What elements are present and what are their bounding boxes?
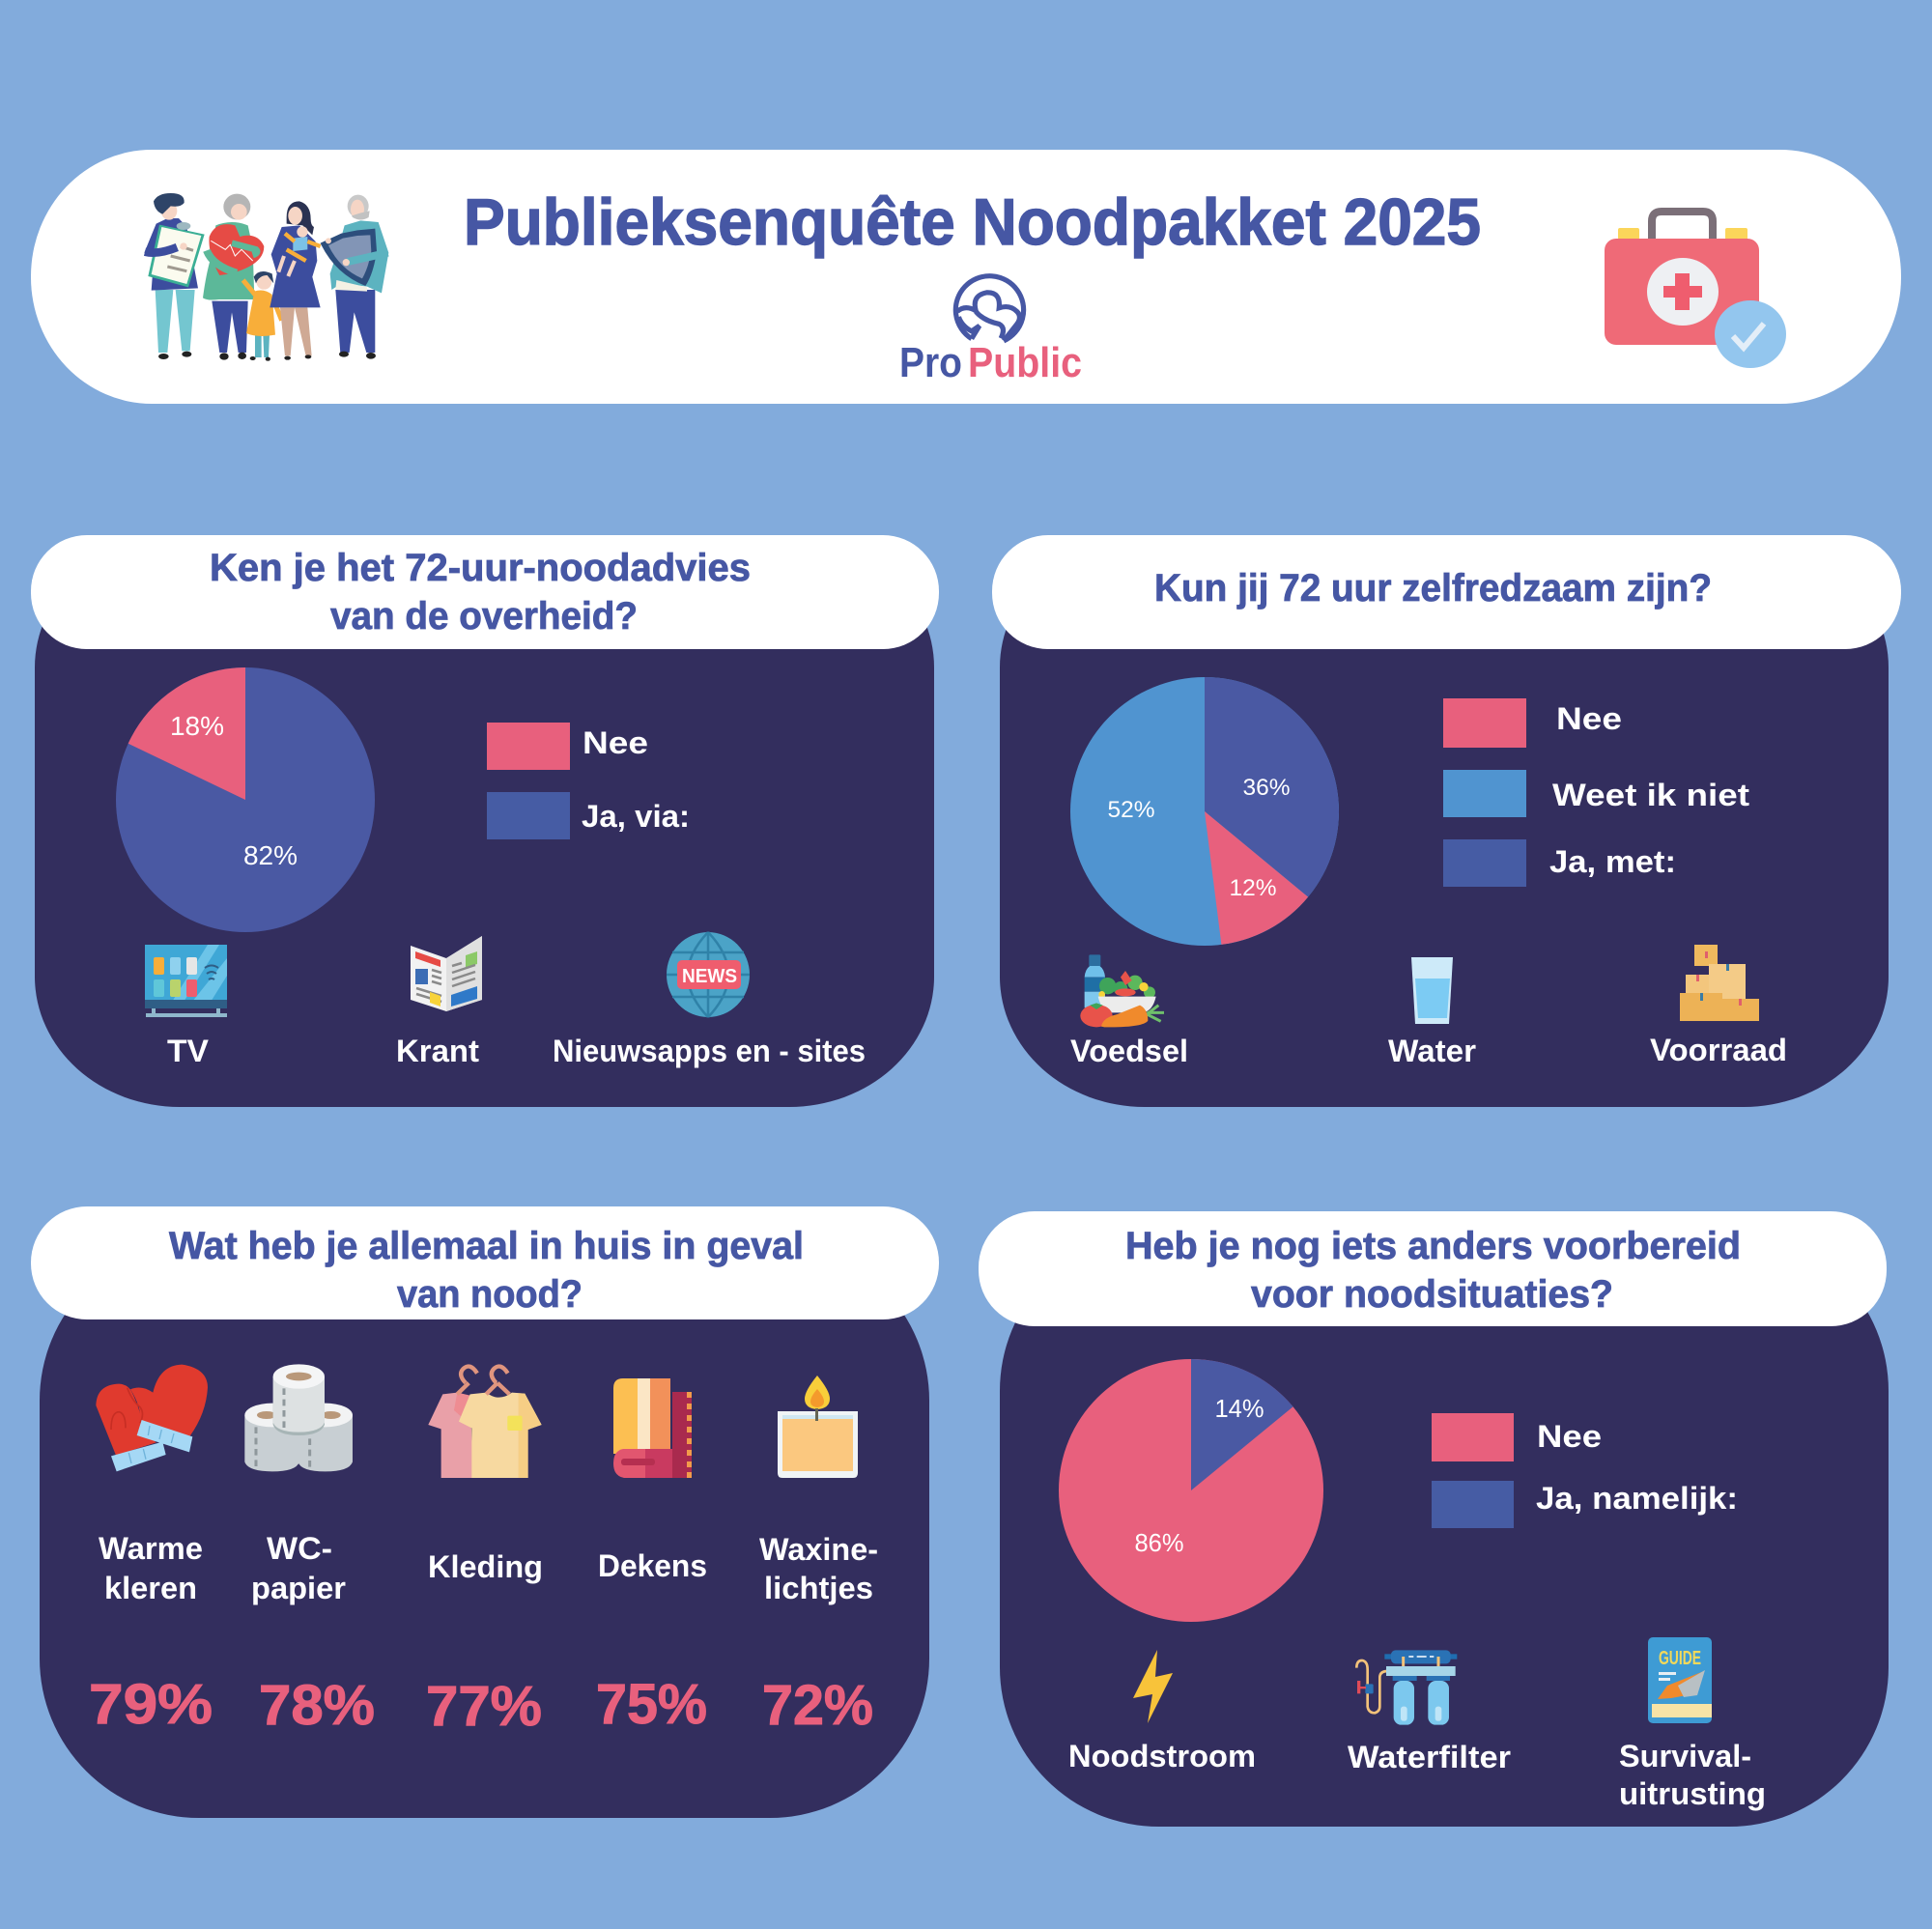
pie chart: 36 / 12 / 52: 52% <box>1107 797 1155 823</box>
icon: food <box>1080 954 1164 1027</box>
header banner <box>31 150 1901 404</box>
pie chart: 82 / 18: 18% <box>170 711 224 741</box>
labels: supplies: Voedsel <box>1070 1034 1188 1068</box>
pie chart: 36 / 12 / 52 <box>1070 677 1339 946</box>
labels: media: Krant <box>396 1034 479 1068</box>
logo: ProPublic <box>899 276 1082 386</box>
icon: water filter <box>1356 1650 1457 1725</box>
labels: supplies: Voorraad <box>1650 1033 1787 1067</box>
heading: panel 4: voor noodsituaties? <box>1251 1273 1613 1316</box>
percentages: 72% <box>762 1674 873 1737</box>
icon: survival guide: GUIDE <box>1659 1648 1701 1669</box>
labels: other preparation <box>1068 1739 1766 1811</box>
title: Publieksenquête Noodpakket 2025 <box>464 185 1481 259</box>
labels: other preparation: uitrusting <box>1619 1776 1766 1811</box>
pie chart: 82 / 18 <box>116 667 375 932</box>
percentages: 79% <box>89 1673 213 1736</box>
logo: ProPublic: Public <box>968 339 1082 386</box>
icon: mittens <box>96 1365 208 1471</box>
pie chart: 14 / 86: 86% <box>1134 1530 1184 1557</box>
icon: clothes <box>428 1367 542 1478</box>
icon: TV <box>145 945 227 1017</box>
labels: items: WC- <box>267 1531 332 1566</box>
pie chart: 14 / 86 <box>1059 1359 1323 1622</box>
labels: items: papier <box>251 1571 346 1605</box>
labels: items: Kleding <box>428 1549 543 1584</box>
panel: 72 uur zelfredzaam <box>992 535 1901 1107</box>
icon: blanket <box>613 1378 692 1478</box>
percentages: 75% <box>596 1673 707 1736</box>
icon: candle <box>778 1376 858 1478</box>
heading: panel 4: Heb je nog iets anders voorbereid <box>1125 1225 1741 1267</box>
pie chart: 14 / 86: 14% <box>1214 1396 1264 1423</box>
pie chart: 36 / 12 / 52: 36% <box>1242 775 1291 801</box>
labels: items <box>99 1531 878 1605</box>
legend: Nee <box>1556 701 1622 736</box>
labels: other preparation: Noodstroom <box>1068 1739 1256 1773</box>
labels: supplies: Water <box>1388 1034 1476 1068</box>
pie chart: 36 / 12 / 52: 12% <box>1229 875 1277 901</box>
legend: Ja, namelijk: <box>1536 1481 1738 1516</box>
legend: Nee <box>1537 1419 1602 1454</box>
labels: items: Warme <box>99 1531 203 1566</box>
percentages: 78% <box>259 1674 375 1737</box>
icon: family of five <box>144 193 388 361</box>
legend <box>487 723 690 839</box>
labels: supplies <box>1070 1033 1787 1068</box>
labels: items: Dekens <box>598 1548 707 1583</box>
icon: survival guide <box>1648 1637 1712 1723</box>
pie chart: 82 / 18: 82% <box>243 840 298 870</box>
panel: iets anders voorbereid <box>979 1211 1889 1827</box>
heading: panel 4 <box>979 1211 1887 1326</box>
icon: boxes <box>1680 945 1759 1021</box>
legend <box>1432 1413 1738 1528</box>
heading: panel 2 <box>992 535 1901 649</box>
icon: news globe: NEWS <box>682 966 737 987</box>
percentages: 77% <box>426 1675 542 1738</box>
legend: Ja, via: <box>582 799 690 834</box>
labels: media <box>167 1034 866 1068</box>
icon: toilet paper <box>244 1364 353 1471</box>
labels: items: Waxine- <box>759 1532 878 1567</box>
icon: glass of water <box>1411 957 1453 1024</box>
heading: panel 3: van nood? <box>397 1273 582 1316</box>
labels: items: kleren <box>104 1571 197 1605</box>
panel: 72-uur-noodadvies <box>31 535 939 1107</box>
icon: news globe <box>667 932 750 1017</box>
labels: other preparation: Survival- <box>1619 1739 1751 1773</box>
labels: media: Nieuwsapps en - sites <box>553 1034 866 1068</box>
heading: panel 3 <box>31 1206 939 1319</box>
labels: media: TV <box>167 1034 210 1068</box>
heading: panel 1: Ken je het 72-uur-noodadvies <box>210 547 751 589</box>
heading: panel 2: Kun jij 72 uur zelfredzaam zijn? <box>1154 567 1712 610</box>
labels: items: lichtjes <box>764 1571 873 1605</box>
panel: in huis in geval van nood <box>31 1206 939 1818</box>
heading: panel 1 <box>31 535 939 649</box>
legend <box>1443 698 1749 887</box>
icon: first aid kit <box>1605 212 1786 368</box>
labels: other preparation: Waterfilter <box>1348 1740 1511 1774</box>
icon: lightning bolt <box>1133 1650 1173 1723</box>
legend: Weet ik niet <box>1552 778 1749 812</box>
legend: Ja, met: <box>1549 844 1676 879</box>
percentages <box>89 1673 873 1738</box>
logo: ProPublic: Pro <box>899 339 962 386</box>
icon: newspaper <box>411 936 482 1011</box>
legend: Nee <box>582 725 648 760</box>
heading: panel 3: Wat heb je allemaal in huis in geval <box>169 1225 804 1267</box>
heading: panel 1: van de overheid? <box>330 595 638 638</box>
